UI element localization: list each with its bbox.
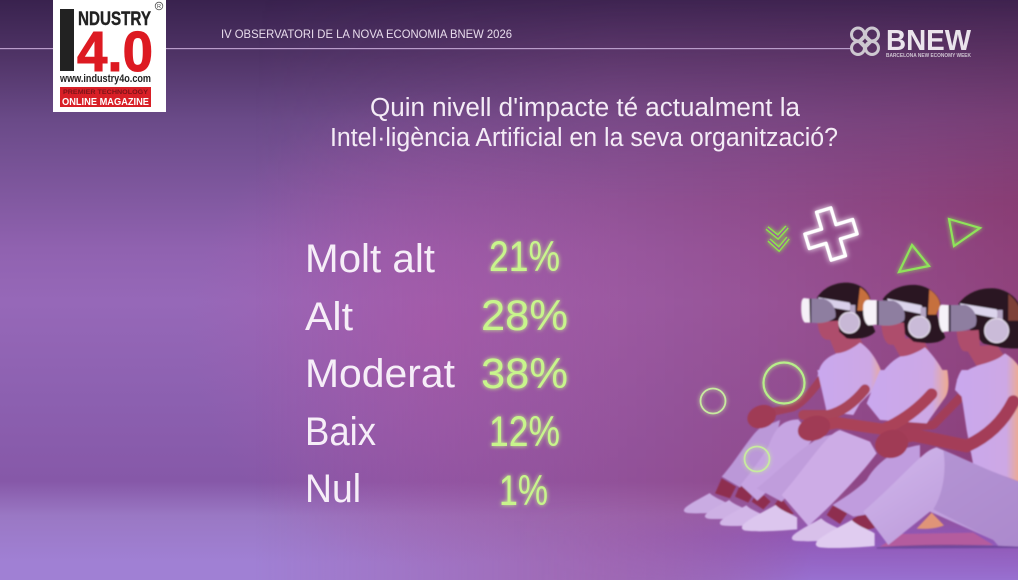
- row: Moderat: [305, 350, 568, 398]
- headset 1: [801, 297, 860, 333]
- row: Nul: Nul: [305, 467, 361, 511]
- row: Molt alt: 21%: [489, 233, 560, 281]
- illustration: three people with VR headsets: [684, 283, 1018, 549]
- icon: neon triangle upper right: [949, 219, 980, 246]
- logo: Industry 4.0: PREMIER TECHNOLOGY: [63, 89, 149, 96]
- headset 3: [939, 303, 1009, 343]
- row: Molt alt: [305, 233, 560, 281]
- icon: neon double chevron: [767, 227, 788, 249]
- header rule: [0, 48, 850, 49]
- trousers person 2: [757, 433, 837, 502]
- rear arms: [763, 378, 962, 427]
- logo: Industry 4.0: ONLINE MAGAZINE: [62, 96, 149, 108]
- row: Baix: Baix: [305, 410, 376, 454]
- headset 2: [863, 299, 930, 338]
- logo: BNEW: BNEW: [886, 25, 972, 57]
- logo: Industry 4.0: www.industry4o.com: [59, 73, 151, 85]
- neon shapes: [700, 203, 980, 472]
- row: Molt alt: Molt alt: [305, 237, 435, 281]
- icon: neon triangle centre: [899, 245, 929, 272]
- row: Nul: 1%: [499, 467, 548, 515]
- logo: BNEW: BARCELONA NEW ECONOMY WEEK: [886, 53, 971, 59]
- row: Moderat: 38%: [481, 350, 568, 398]
- row: Moderat: Moderat: [305, 352, 455, 396]
- logo: Industry 4.0: [53, 0, 166, 112]
- pink floor and peach shape behind figures: [880, 533, 993, 547]
- trousers person 3: [833, 445, 920, 517]
- icon: neon white cross: [800, 203, 862, 265]
- ankles: [715, 478, 736, 498]
- row: Baix: [305, 408, 560, 456]
- icon: BNEW knot: [852, 28, 878, 54]
- title: Quin nivell d'impacte té actualment la: [370, 94, 801, 122]
- trousers person 1: [722, 420, 780, 487]
- hands: [744, 401, 779, 432]
- faces: [817, 321, 839, 340]
- row: Alt: Alt: [305, 295, 353, 339]
- icon: small neon ring left: [700, 388, 726, 414]
- row: Alt: 28%: [481, 292, 568, 340]
- shirts: [817, 370, 884, 415]
- icon: small neon ring on leg: [744, 446, 770, 472]
- logo: Industry 4.0: R: [157, 4, 161, 10]
- bodies, arms and legs: [684, 370, 1018, 549]
- logo: Industry 4.0: 4.0: [77, 20, 153, 84]
- hair: [817, 283, 875, 339]
- heads, necks and upper shirts: [801, 283, 1018, 380]
- row: Alt: [305, 292, 568, 340]
- logo: BNEW: [852, 25, 972, 59]
- floor shadow: [877, 545, 1018, 549]
- row: Baix: 12%: [489, 408, 560, 456]
- title: Intel·ligència Artificial en la seva organització?: [330, 124, 838, 152]
- logo: Industry 4.0: NDUSTRY: [78, 8, 151, 30]
- header label: IV OBSERVATORI DE LA NOVA ECONOMIA BNEW 2026: [221, 27, 512, 41]
- icon: large neon ring: [764, 362, 804, 404]
- results list: [305, 233, 568, 515]
- shoes: [684, 493, 875, 548]
- row: Nul: [305, 467, 548, 515]
- front arms: [803, 389, 1013, 446]
- upper shirts: [817, 343, 884, 380]
- title: [330, 94, 838, 152]
- necks: [827, 332, 864, 360]
